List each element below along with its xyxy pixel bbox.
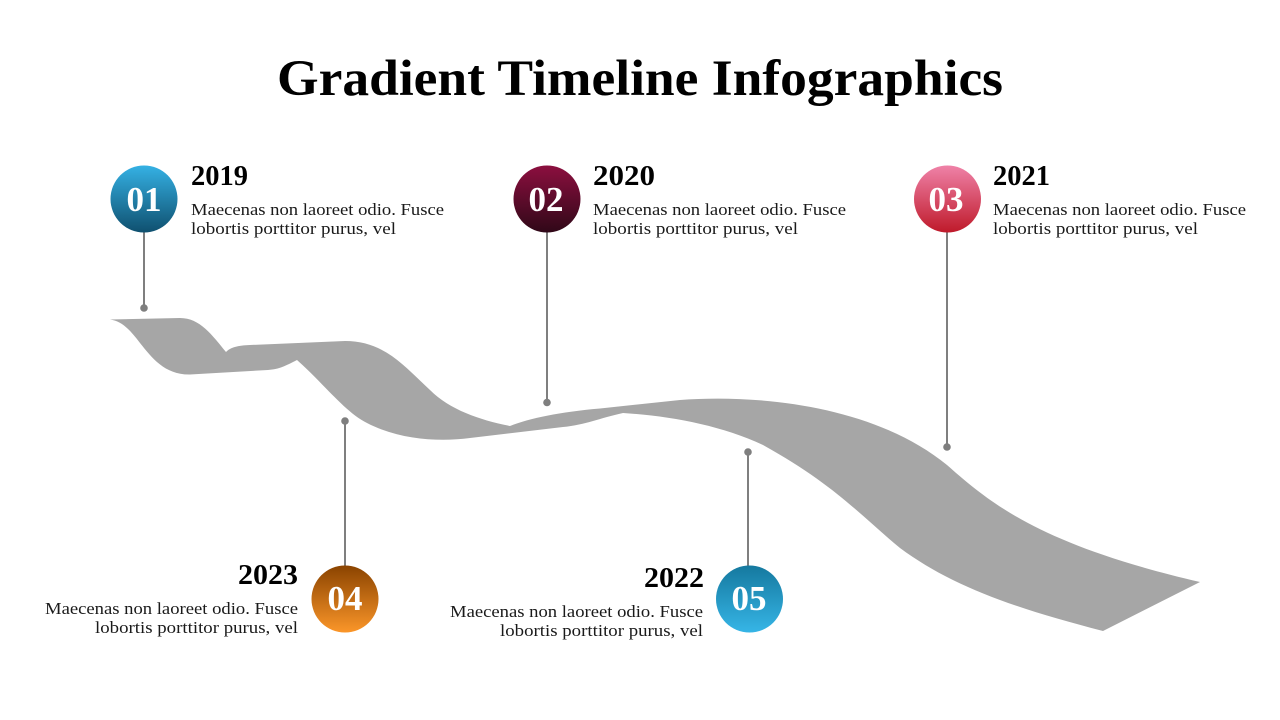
- description 05: lobortis porttitor purus, vel: [500, 621, 703, 640]
- badge 05: [716, 566, 783, 632]
- description 05: Maecenas non laoreet odio. Fusce: [450, 602, 703, 621]
- description 02: lobortis porttitor purus, vel: [593, 219, 798, 238]
- badge 01: [110, 166, 178, 232]
- description 01: Maecenas non laoreet odio. Fusce: [191, 200, 444, 219]
- title: Gradient Timeline Infographics: [277, 51, 1003, 107]
- badge 01: 01: [126, 180, 162, 219]
- badge 03: 03: [928, 180, 964, 219]
- connector 02: [543, 232, 551, 406]
- badge 04: 04: [328, 579, 362, 618]
- connector 03: [943, 232, 951, 451]
- description 03: lobortis porttitor purus, vel: [993, 219, 1198, 238]
- year 2022: 2022: [644, 562, 704, 594]
- milestone 05: 2022: [450, 448, 783, 640]
- milestone 04: 2023: [45, 417, 378, 637]
- description 01: [191, 200, 444, 238]
- badge 02: [514, 166, 580, 232]
- description 04: lobortis porttitor purus, vel: [95, 618, 298, 637]
- year 2020: 2020: [593, 160, 655, 192]
- connector 01: [140, 232, 148, 312]
- year 2023: 2023: [238, 559, 298, 591]
- year 2019: 2019: [191, 160, 248, 192]
- description 02: [593, 200, 846, 238]
- badge 05: 05: [732, 579, 766, 618]
- milestone 03: 2021: [914, 160, 1246, 451]
- description 04: Maecenas non laoreet odio. Fusce: [45, 599, 298, 618]
- description 02: Maecenas non laoreet odio. Fusce: [593, 200, 846, 219]
- description 04: [45, 599, 298, 637]
- description 01: lobortis porttitor purus, vel: [191, 219, 396, 238]
- description 05: [450, 602, 703, 640]
- ribbon timeline: [110, 318, 1200, 631]
- connector 05: [744, 448, 752, 566]
- description 03: Maecenas non laoreet odio. Fusce: [993, 200, 1246, 219]
- badge 04: [312, 566, 378, 632]
- description 03: [993, 200, 1246, 238]
- connector 04: [341, 417, 349, 566]
- badge 03: [914, 166, 981, 232]
- year 2021: 2021: [993, 160, 1050, 192]
- milestone 02: 2020: [514, 160, 846, 406]
- milestone 01: 2019: [110, 160, 444, 312]
- badge 02: 02: [528, 180, 564, 219]
